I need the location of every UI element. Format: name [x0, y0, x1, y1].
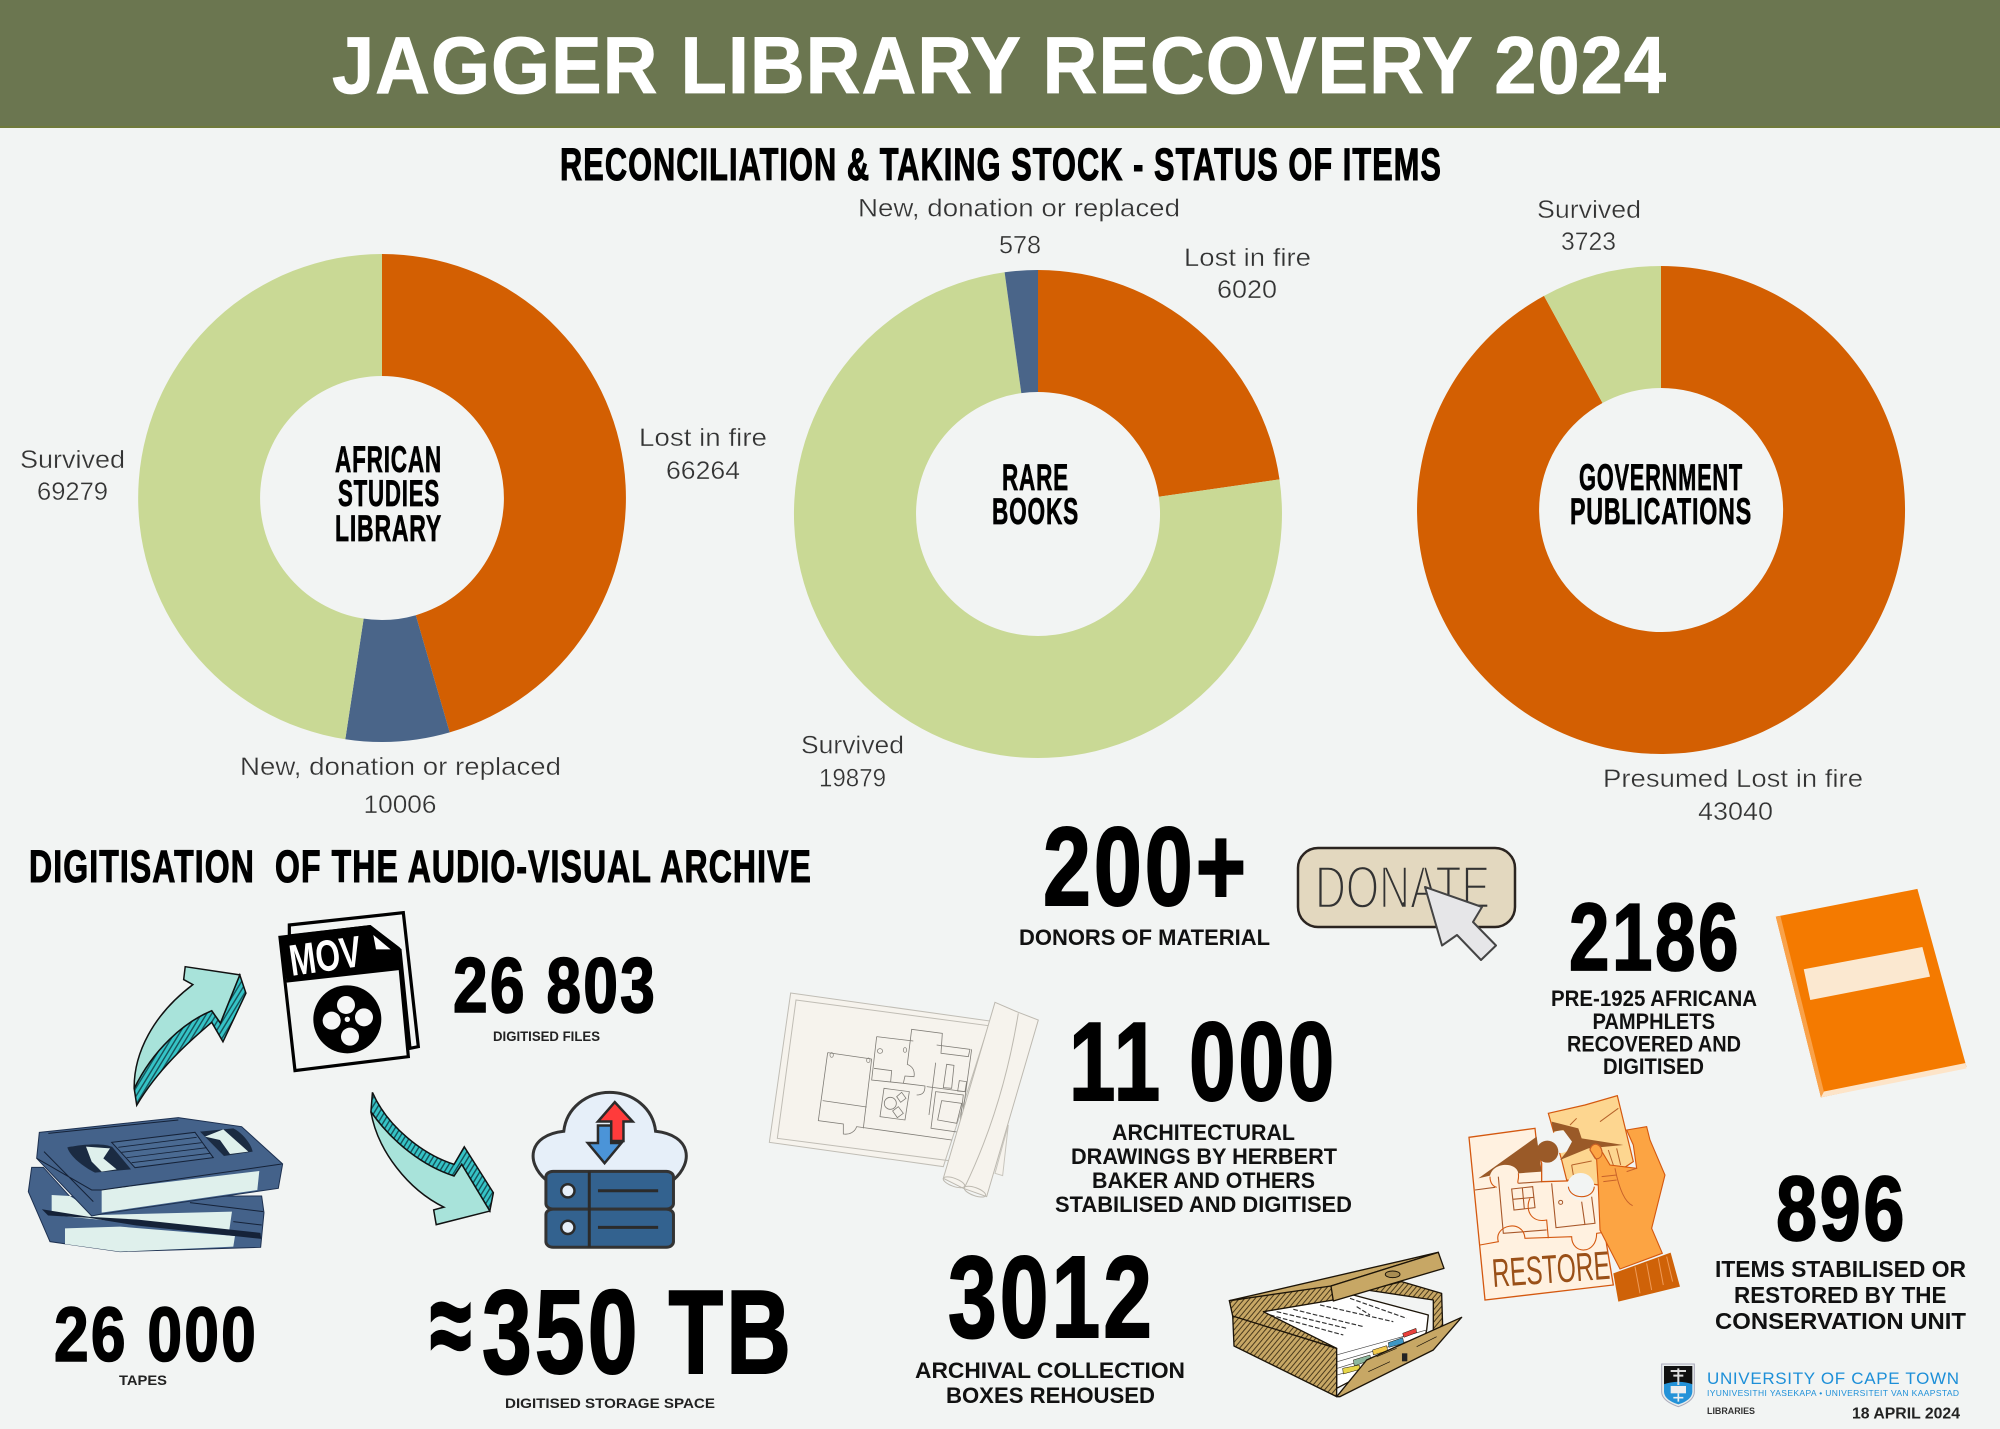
icon: cloud server — [533, 1092, 686, 1247]
icon: orange book — [1776, 889, 1966, 1097]
label: lost in fire 6020 — [1184, 244, 1311, 304]
label: survived 19879 — [801, 732, 904, 793]
label: lost in fire 66264: Lost in fire — [639, 424, 767, 452]
stat: 2186 pamphlets: RECOVERED AND — [1567, 1032, 1741, 1056]
label: survived 69279 — [20, 446, 125, 506]
stat: 3012 archival collection boxes: 3012 — [948, 1232, 1155, 1362]
donut centre label: African Studies Library: LIBRARY — [335, 508, 442, 549]
donut chart: African Studies Library — [20, 254, 767, 819]
stat: 2186 pamphlets: 2186 — [1569, 884, 1741, 991]
donut centre label: African Studies Library: STUDIES — [338, 473, 440, 514]
stat: 11 000 architectural drawings: ARCHITECTURAL — [1112, 1120, 1295, 1145]
label: survived 69279: Survived — [20, 446, 125, 474]
stat: 2186 pamphlets — [1551, 884, 1757, 1079]
title: JAGGER LIBRARY RECOVERY 2024 — [332, 21, 1667, 111]
icon: MOV file: MOV — [286, 927, 365, 986]
label: survived 3723: Survived — [1537, 196, 1641, 224]
stat: 3012 archival collection boxes — [915, 1232, 1185, 1408]
label: presumed lost in fire 43040: Presumed Lost in fire — [1603, 765, 1863, 793]
donut chart: Government Publications — [1417, 196, 1905, 826]
label: new, donation or replaced 578 — [858, 194, 1180, 260]
section heading: audio-visual digitisation: DIGITISATION OF THE AUDIO-VISUAL ARCHIVE — [29, 841, 812, 892]
logo: University of Cape Town: LIBRARIES — [1707, 1406, 1755, 1417]
icon: restore puzzle with hand: RESTORE — [1491, 1244, 1611, 1296]
icon: VHS tape stack — [28, 1118, 283, 1252]
label: lost in fire 6020: Lost in fire — [1184, 244, 1311, 272]
stat: 896 items stabilised: ITEMS STABILISED OR — [1715, 1256, 1966, 1282]
label: lost in fire 66264: 66264 — [666, 457, 740, 485]
stat: 26 803 digitised files: DIGITISED FILES — [493, 1028, 600, 1044]
donut centre label: Rare Books — [992, 457, 1079, 532]
donut centre label: African Studies Library: AFRICAN — [335, 439, 442, 480]
icon: donate button with cursor — [1298, 848, 1515, 960]
stat: approx 350 TB digitised storage space: 350 TB — [482, 1266, 794, 1399]
stat: 200+ donors of material: DONORS OF MATERIAL — [1019, 925, 1270, 950]
stat: 26 000 tapes: 26 000 — [54, 1292, 258, 1378]
icon: archival box — [1229, 1252, 1462, 1397]
label: new, donation or replaced 10006 — [240, 753, 561, 819]
stat: 896 items stabilised: CONSERVATION UNIT — [1715, 1308, 1966, 1334]
stat: 11 000 architectural drawings: DRAWINGS BY HERBERT — [1071, 1144, 1338, 1169]
label: new, donation or replaced 10006: New, donation or replaced — [240, 753, 561, 781]
stat: 896 items stabilised: 896 — [1776, 1158, 1907, 1260]
stat: 11 000 architectural drawings — [1055, 1000, 1352, 1217]
stat: approx 350 TB digitised storage space — [430, 1258, 794, 1411]
donut centre label: Government Publications: PUBLICATIONS — [1570, 491, 1752, 532]
label: survived 3723 — [1537, 196, 1641, 256]
stat: 896 items stabilised: RESTORED BY THE — [1734, 1282, 1946, 1308]
stat: 2186 pamphlets: PAMPHLETS — [1592, 1009, 1715, 1034]
label: new, donation or replaced 578: New, donation or replaced — [858, 194, 1180, 222]
label: lost in fire 6020: 6020 — [1217, 276, 1277, 304]
label: survived 69279: 69279 — [37, 478, 108, 506]
donut centre label: Rare Books: BOOKS — [992, 491, 1079, 532]
stat: 26 000 tapes: TAPES — [119, 1372, 167, 1388]
icon: restore puzzle with hand — [1469, 1096, 1680, 1302]
stat: 3012 archival collection boxes: ARCHIVAL COLLECTION — [915, 1358, 1185, 1383]
stat: 11 000 architectural drawings: STABILISED AND DIGITISED — [1055, 1192, 1352, 1217]
arrow: tapes to files — [134, 967, 246, 1105]
logo: University of Cape Town: UNIVERSITY OF CAPE TOWN — [1707, 1369, 1959, 1388]
stat: 3012 archival collection boxes: BOXES REHOUSED — [946, 1383, 1155, 1408]
label: survived 3723: 3723 — [1561, 228, 1616, 256]
label: survived 19879: Survived — [801, 732, 904, 760]
icon: MOV file — [280, 913, 418, 1071]
date: 18 APRIL 2024 — [1852, 1406, 1960, 1422]
stat: 896 items stabilised — [1715, 1158, 1966, 1334]
stat: approx 350 TB digitised storage space: DIGITISED STORAGE SPACE — [505, 1395, 715, 1411]
donut centre label: Rare Books: RARE — [1002, 457, 1069, 498]
label: presumed lost in fire 43040: 43040 — [1698, 798, 1773, 826]
stat: 11 000 architectural drawings: 11 000 — [1069, 1000, 1337, 1124]
donut chart: Rare Books — [794, 194, 1311, 793]
stat: 2186 pamphlets: PRE-1925 AFRICANA — [1551, 986, 1757, 1011]
label: new, donation or replaced 10006: 10006 — [364, 791, 436, 819]
stat: 11 000 architectural drawings: BAKER AND OTHERS — [1092, 1168, 1315, 1193]
stat: 26 803 digitised files: 26 803 — [453, 941, 657, 1029]
icon: architectural floor plan — [769, 993, 1038, 1199]
stat: 200+ donors of material: 200+ — [1043, 805, 1249, 929]
label: new, donation or replaced 578: 578 — [999, 232, 1041, 260]
donut centre label: Government Publications — [1570, 457, 1752, 532]
donut centre label: African Studies Library — [335, 439, 442, 549]
stat: approx 350 TB digitised storage space: ≈ — [430, 1258, 474, 1392]
logo: University of Cape Town — [1662, 1364, 1959, 1417]
arrow: files to storage — [371, 1092, 493, 1225]
section heading: status of items: RECONCILIATION & TAKING STOCK - STATUS OF ITEMS — [560, 139, 1442, 190]
logo: University of Cape Town: IYUNIVESITHI YASEKAPA • UNIVERSITEIT VAN KAAPSTAD — [1707, 1388, 1959, 1398]
header banner — [0, 0, 2000, 128]
label: lost in fire 66264 — [639, 424, 767, 485]
label: presumed lost in fire 43040 — [1603, 765, 1863, 826]
donut centre label: Government Publications: GOVERNMENT — [1579, 457, 1743, 498]
label: survived 19879: 19879 — [819, 765, 886, 793]
stat: 200+ donors of material — [1019, 805, 1270, 950]
stat: 2186 pamphlets: DIGITISED — [1603, 1054, 1704, 1079]
icon: donate button with cursor: DONATE — [1315, 854, 1490, 921]
